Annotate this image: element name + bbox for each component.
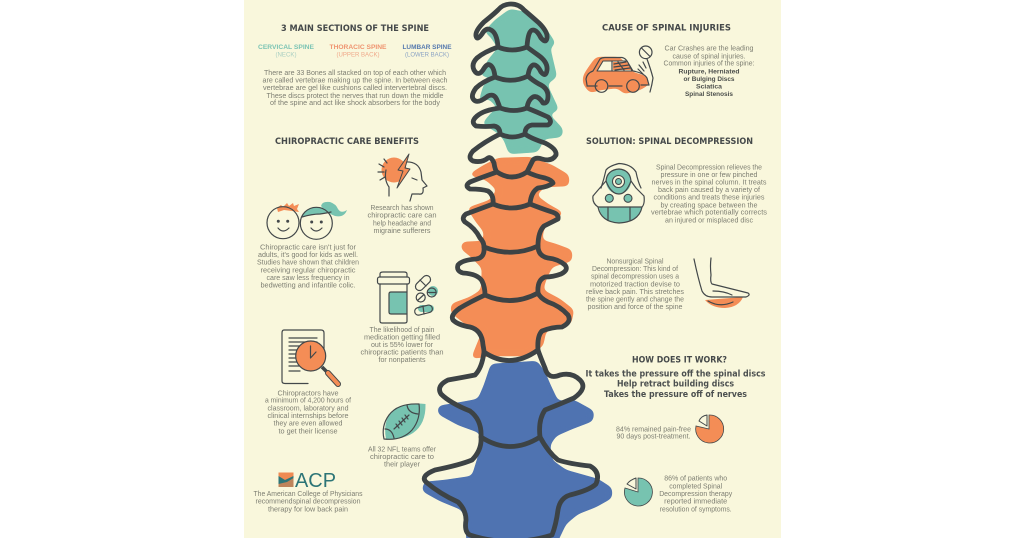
background panel	[244, 0, 781, 538]
text: spinal decompression description: vertebrae which potentially corrects	[651, 210, 768, 217]
text: car crashes: Sciatica	[696, 84, 722, 91]
text: car crashes: Car Crashes are the leading	[664, 46, 754, 53]
text: spinal decompression description: nerves in the spinal column. It treats	[652, 179, 767, 186]
text: ACP recommendation: therapy for low back pain	[268, 506, 348, 513]
text: nonsurgical decompression: Nonsurgical Spinal	[606, 258, 664, 265]
text: headache research: chiropractic care can	[368, 213, 437, 220]
text: pain medication: out is 55% lower for	[371, 342, 434, 349]
text: car crashes	[664, 46, 755, 98]
pie chart: 84 percent	[696, 415, 724, 443]
icon: pill bottle and pills	[378, 272, 438, 323]
text: kids chiropractic care: Chiropractic care isn't just for	[260, 244, 357, 251]
text: spinal decompression description: back pain caused by a variety of	[658, 187, 760, 194]
text: spinal decompression description: conditions and treats these injuries	[654, 195, 765, 202]
heading: chiropractic care benefits: CHIROPRACTIC CARE BENEFITS	[275, 137, 419, 147]
text: chiropractor training: clinical internships before	[268, 413, 349, 420]
text: kids chiropractic care: bedwetting and infantile colic.	[260, 282, 356, 289]
text: chiropractor training: classroom, laboratory and	[268, 405, 349, 412]
thoracic spine colour fill	[451, 157, 574, 359]
text: pain medication	[360, 327, 444, 364]
text: 86 percent stat	[659, 476, 733, 513]
text: nonsurgical decompression: motorized traction devise to	[590, 281, 680, 288]
vertebra 2 outline	[473, 47, 547, 80]
text: nonsurgical decompression	[586, 258, 684, 311]
vertebra 7 outline	[463, 204, 558, 252]
legend: lumbar spine: LUMBAR SPINE	[402, 44, 452, 51]
vertebra 6 outline	[467, 172, 553, 208]
text: car crashes: Rupture, Herniated	[678, 68, 740, 75]
icon: vertebra cross-section	[593, 164, 644, 223]
legend: cervical spine	[258, 44, 315, 58]
logo: ACP: ACP	[295, 469, 336, 492]
text: spinal decompression description: by creating space between the	[660, 202, 758, 209]
vertebra 3 outline	[472, 76, 548, 110]
text: nonsurgical decompression: the spine gently and change the	[586, 297, 684, 304]
text: kids chiropractic care: receiving regular chiropractic	[260, 267, 356, 274]
icon: football	[383, 404, 426, 439]
heading: solution spinal decompression: SOLUTION: SPINAL DECOMPRESSION	[586, 137, 753, 147]
icon: two children faces	[267, 202, 347, 239]
text: 86 percent stat: completed Spinal	[669, 483, 723, 490]
vertebra 1 outline	[476, 4, 547, 50]
text: NFL teams: their player	[384, 462, 421, 469]
text: pain medication: for nonpatients	[378, 357, 426, 364]
text: 86 percent stat: Decompression therapy	[659, 491, 733, 498]
text: kids chiropractic care: adults, it's good for kids as well.	[258, 252, 358, 259]
cervical spine colour fill	[478, 9, 563, 154]
text: nonsurgical decompression: position and force of the spine	[588, 304, 683, 311]
text: car crashes: or Bulging Discs	[684, 76, 735, 83]
legend: cervical spine: CERVICAL SPINE	[258, 44, 315, 51]
text: how it works list	[586, 368, 766, 399]
text: nonsurgical decompression: relive back pain. This stretches	[586, 289, 684, 296]
text: pain medication: medication getting filled	[364, 335, 440, 342]
text: spine description	[262, 70, 448, 107]
text: car crashes: cause of spinal injuries.	[672, 53, 746, 60]
text: spinal decompression description: pressure in one or few pinched	[660, 172, 758, 179]
spine illustration	[422, 4, 612, 538]
text: 84 percent stat	[616, 426, 691, 441]
text: chiropractor training: they are even allowed	[274, 421, 343, 428]
vertebra 10 outline	[440, 350, 583, 446]
pie chart: 86 percent	[624, 478, 652, 506]
text: how it works list: It takes the pressure off the spinal discs	[586, 368, 766, 378]
text: headache research	[368, 205, 437, 235]
text: headache research: Research has shown	[370, 205, 434, 212]
icon: head with migraine bolt	[378, 154, 427, 201]
text: NFL teams: All 32 NFL teams offer	[368, 446, 437, 453]
heading: how does it work: HOW DOES IT WORK?	[632, 355, 727, 365]
text: headache research: migraine sufferers	[374, 228, 431, 235]
text: NFL teams	[368, 446, 437, 469]
text: spinal decompression description: an injured or misplaced disc	[665, 217, 754, 224]
vertebra 11 outline	[424, 437, 598, 538]
text: pain medication: The likelihood of pain	[370, 327, 435, 334]
text: spine description: of the spine and act like shock absorbers for the body	[270, 100, 441, 107]
icon: lower back traction	[694, 258, 749, 308]
text: chiropractor training: to get their license	[278, 428, 338, 435]
legend: lumbar spine: (LOWER BACK)	[405, 52, 449, 58]
legend: cervical spine: (NECK)	[276, 52, 296, 58]
vertebra 8 outline	[458, 246, 566, 301]
legend: thoracic spine	[330, 44, 387, 58]
legend: thoracic spine: (UPPER BACK)	[336, 52, 380, 58]
text: chiropractor training	[265, 390, 351, 435]
logo: ACP	[278, 469, 336, 492]
icon: crashed car	[583, 46, 653, 94]
text: spine description: These discs protect the nerves that run down the middle	[266, 93, 444, 100]
text: 86 percent stat: reported immediate	[664, 499, 727, 506]
legend: thoracic spine: THORACIC SPINE	[330, 44, 387, 51]
text: 84 percent stat: 84% remained pain-free	[616, 426, 691, 433]
text: chiropractor training: a minimum of 4,200 hours of	[265, 398, 351, 405]
text: ACP recommendation	[254, 491, 363, 513]
text: chiropractor training: Chiropractors have	[278, 390, 339, 397]
text: spinal decompression description: Spinal Decompression relieves the	[656, 164, 762, 171]
vertebra 4 outline	[473, 108, 550, 137]
text: car crashes: Common injuries of the spine:	[664, 61, 755, 68]
legend: lumbar spine	[402, 44, 452, 58]
text: how it works list: Takes the pressure off of nerves	[604, 389, 747, 399]
text: nonsurgical decompression: Decompression: This kind of	[592, 266, 678, 273]
heading: cause of spinal injuries: CAUSE OF SPINAL INJURIES	[602, 24, 731, 34]
text: pain medication: chiropractic patients than	[360, 350, 444, 357]
text: 86 percent stat: 86% of patients who	[664, 476, 727, 483]
text: spine description: There are 33 Bones all stacked on top of each other which	[264, 70, 446, 77]
text: spine description: vertebrae are gel like cushions called intervertebral discs.	[263, 85, 447, 92]
text: kids chiropractic care: Studies have shown that children	[257, 260, 359, 267]
text: headache research: help headache and	[373, 220, 431, 227]
text: spine description: are called vertebrae making up the spine. In between each	[262, 78, 448, 84]
vertebra 5 outline	[470, 134, 556, 177]
text: ACP recommendation: The American College of Physicians	[254, 491, 363, 498]
text: nonsurgical decompression: spinal decompression uses a	[591, 274, 679, 281]
text: 84 percent stat: 90 days post-treatment.	[616, 434, 691, 441]
text: kids chiropractic care	[257, 244, 359, 289]
text: ACP recommendation: recommendspinal decompression	[256, 499, 361, 506]
text: 86 percent stat: resolution of symptoms.	[660, 506, 732, 513]
lumbar spine colour fill	[422, 361, 612, 538]
icon: document with magnifier	[282, 330, 338, 384]
heading: 3 main sections: 3 MAIN SECTIONS OF THE SPINE	[281, 24, 429, 34]
text: kids chiropractic care: care saw less frequency in	[266, 275, 350, 282]
text: spinal decompression description	[651, 164, 768, 224]
vertebra 9 outline	[452, 293, 569, 361]
text: NFL teams: chiropractic care to	[370, 454, 434, 461]
text: how it works list: Help retract building discs	[617, 379, 734, 389]
text: car crashes: Spinal Stenosis	[685, 91, 733, 98]
